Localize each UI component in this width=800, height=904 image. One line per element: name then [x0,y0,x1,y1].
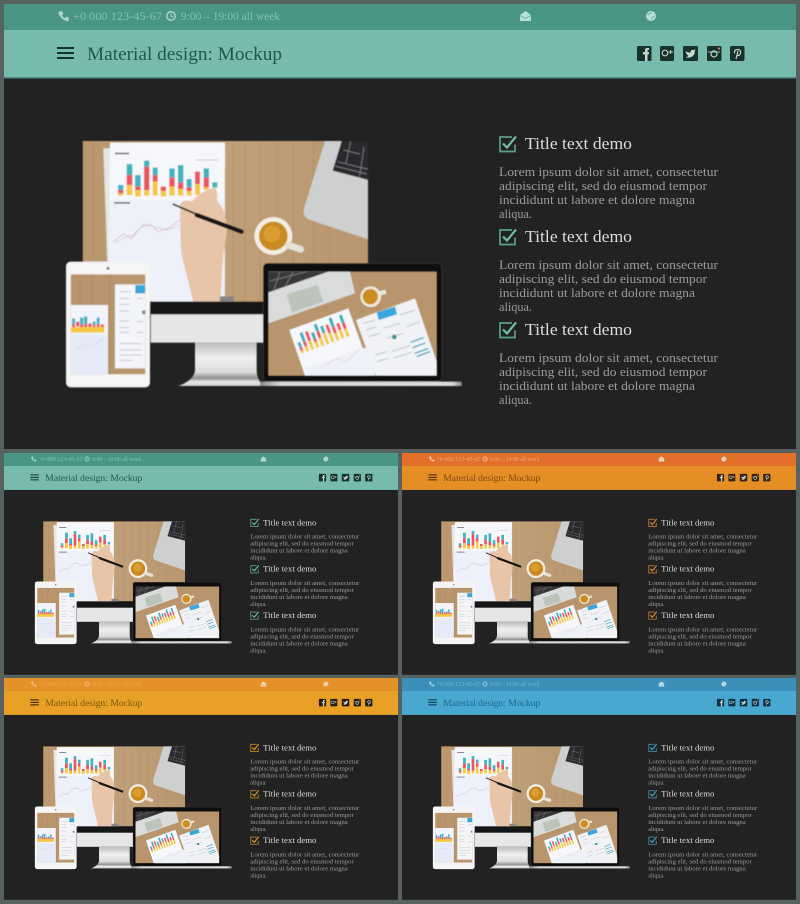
feature list: incididunt ut labore et dolore magna [250,865,348,872]
feature list: Title text demo [661,743,714,752]
feature list: Lorem ipsum dolor sit amet, consectetur [250,580,360,587]
top contact bar: 9:00 – 19:00 all week [92,682,141,688]
device mockup illustration [433,521,630,644]
item text [499,257,719,314]
header bar [402,466,796,490]
top contact bar: +0 000 123-45-67 [38,682,83,688]
dark slide body [402,490,796,675]
feature list: adipiscing elit, sed do eiusmod tempor [250,766,355,773]
feature list: adipiscing elit, sed do eiusmod tempor [648,633,753,640]
feature list: Lorem ipsum dolor sit amet, consectetur [648,759,758,766]
feature list: incididunt ut labore et dolore magna [250,640,348,647]
icon: globe [646,11,656,21]
feature list: Lorem ipsum dolor sit amet, consectetur [648,851,758,858]
feature list: Title text demo [263,565,316,574]
feature list: adipiscing elit, sed do eiusmod tempor [648,541,753,548]
feature list: aliqua. [648,647,665,654]
feature list: Title text demo [661,565,714,574]
feature list: Lorem ipsum dolor sit amet, consectetur [250,805,360,812]
feature list: Title text demo [263,611,316,620]
feature list: Title text demo [263,790,316,799]
panel: orange thumbnail [402,453,796,675]
feature item 1 [499,134,719,221]
feature list: incididunt ut labore et dolore magna [648,594,746,601]
feature list: aliqua. [250,647,267,654]
header bar [4,691,398,715]
feature list: incididunt ut labore et dolore magna [648,548,746,555]
panel: yellow thumbnail [4,678,398,900]
feature list: Lorem ipsum dolor sit amet, consectetur [250,851,360,858]
item text [499,164,719,221]
icon: hamburger menu [57,48,74,58]
feature list: Lorem ipsum dolor sit amet, consectetur [250,534,360,541]
top contact bar [4,453,398,466]
top contact bar: +0 000 123-45-67 [436,682,481,688]
header bar [4,30,796,79]
item text: adipiscing elit, sed do eiusmod tempor [499,271,708,286]
feature list: Title text demo [661,790,714,799]
header bar: Material design: Mockup [443,698,541,708]
item text: aliqua. [499,392,532,407]
header bar: Material design: Mockup [443,473,541,483]
feature list: Lorem ipsum dolor sit amet, consectetur [648,534,758,541]
icon: check box [500,136,516,152]
item text: adipiscing elit, sed do eiusmod tempor [499,178,708,193]
feature list: Lorem ipsum dolor sit amet, consectetur [648,805,758,812]
feature item 2 [499,227,719,314]
phone number: +0 000 123-45-67 [73,11,162,23]
item text: incididunt ut labore et dolore magna [499,378,695,393]
item text [499,350,719,407]
feature list: Title text demo [661,518,714,527]
item title: Title text demo [525,227,632,246]
item title: Title text demo [525,134,632,153]
feature list: incididunt ut labore et dolore magna [250,548,348,555]
item text: Lorem ipsum dolor sit amet, consectetur [499,164,719,179]
feature list: adipiscing elit, sed do eiusmod tempor [250,858,355,865]
dark slide body [402,715,796,900]
feature list: incididunt ut labore et dolore magna [250,773,348,780]
top contact bar: +0 000 123-45-67 [436,457,481,463]
feature list [250,518,360,654]
feature list: adipiscing elit, sed do eiusmod tempor [250,812,355,819]
feature list: adipiscing elit, sed do eiusmod tempor [648,812,753,819]
item title: Title text demo [525,320,632,339]
feature list: aliqua. [648,872,665,879]
item text: incididunt ut labore et dolore magna [499,192,695,207]
feature list: Lorem ipsum dolor sit amet, consectetur [648,580,758,587]
item text: incididunt ut labore et dolore magna [499,285,695,300]
feature list: adipiscing elit, sed do eiusmod tempor [250,633,355,640]
panel: teal thumbnail [4,453,398,675]
item text: Lorem ipsum dolor sit amet, consectetur [499,257,719,272]
item text: aliqua. [499,206,532,221]
top contact bar [4,678,398,691]
item text: aliqua. [499,299,532,314]
feature list: Title text demo [263,743,316,752]
feature list: Lorem ipsum dolor sit amet, consectetur [250,626,360,633]
opening hours: 9:00 – 19:00 all week [181,11,280,23]
device mockup illustration [66,141,462,387]
top contact bar: 9:00 – 19:00 all week [490,457,539,463]
header bar [402,691,796,715]
feature list: adipiscing elit, sed do eiusmod tempor [250,541,355,548]
feature list [648,518,758,654]
feature list: Title text demo [263,836,316,845]
social icons [637,46,744,61]
icon: check box [500,230,516,244]
feature list: aliqua. [250,601,267,608]
feature list: incididunt ut labore et dolore magna [648,640,746,647]
top contact bar [4,4,796,30]
top contact bar [402,678,796,691]
feature list: adipiscing elit, sed do eiusmod tempor [648,587,753,594]
feature list: Lorem ipsum dolor sit amet, consectetur [250,759,360,766]
feature list: aliqua. [250,826,267,833]
panel: blue thumbnail [402,678,796,900]
item text: adipiscing elit, sed do eiusmod tempor [499,364,708,379]
feature list: aliqua. [648,555,665,562]
feature list: adipiscing elit, sed do eiusmod tempor [648,858,753,865]
feature list: adipiscing elit, sed do eiusmod tempor [250,587,355,594]
feature list: Lorem ipsum dolor sit amet, consectetur [648,626,758,633]
feature list: aliqua. [250,872,267,879]
top contact bar: +0 000 123-45-67 [38,457,83,463]
feature item 3 [499,320,719,407]
feature list: Title text demo [263,518,316,527]
feature list: incididunt ut labore et dolore magna [648,865,746,872]
dark slide body [4,78,796,449]
item text: Lorem ipsum dolor sit amet, consectetur [499,350,719,365]
feature list: aliqua. [648,826,665,833]
feature list: Title text demo [661,611,714,620]
feature list: adipiscing elit, sed do eiusmod tempor [648,766,753,773]
heading: Material design: Mockup [87,45,282,65]
icon: phone [58,11,69,21]
top contact bar [402,453,796,466]
dark slide body [4,715,398,900]
feature list: Title text demo [661,836,714,845]
feature list: aliqua. [250,555,267,562]
feature list [648,743,758,879]
header bar: Material design: Mockup [45,473,143,483]
device mockup illustration [35,746,232,869]
feature list: aliqua. [648,780,665,787]
icon: check box [500,322,516,338]
feature list: incididunt ut labore et dolore magna [648,773,746,780]
device mockup illustration [35,521,232,644]
header bar [4,466,398,490]
feature list: aliqua. [648,601,665,608]
panel: main teal slide [4,4,796,449]
top contact bar: 9:00 – 19:00 all week [490,682,539,688]
device mockup illustration [433,746,630,869]
feature list [250,743,360,879]
feature list: incididunt ut labore et dolore magna [648,819,746,826]
icon: clock [167,12,175,20]
feature list: incididunt ut labore et dolore magna [250,594,348,601]
header bar: Material design: Mockup [45,698,143,708]
feature list: incididunt ut labore et dolore magna [250,819,348,826]
feature list: aliqua. [250,780,267,787]
dark slide body [4,490,398,675]
top contact bar: 9:00 – 19:00 all week [92,457,141,463]
icon: mail [520,11,531,21]
